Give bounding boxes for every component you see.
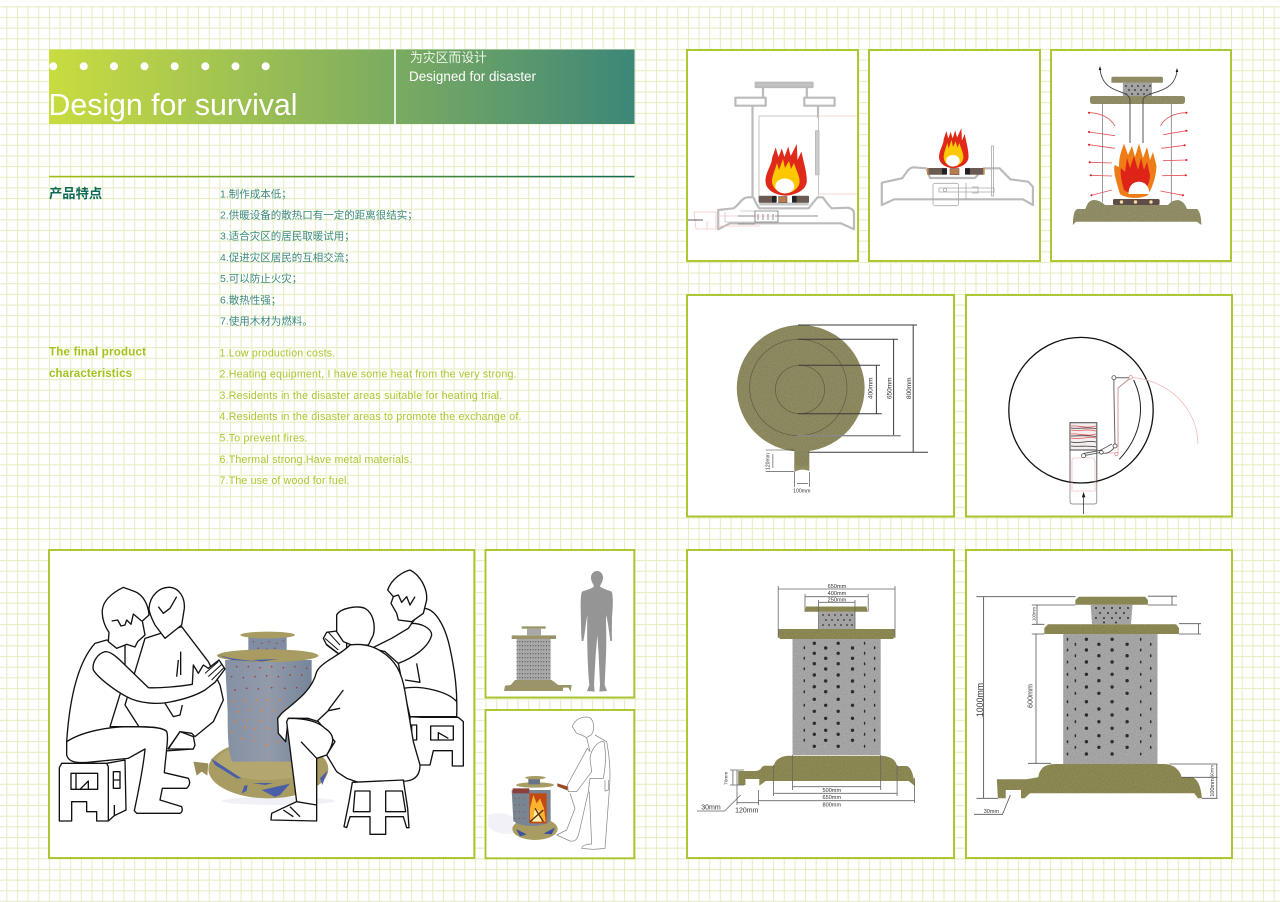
dimension lines xyxy=(974,596,1218,814)
header banner xyxy=(48,50,634,124)
shadow xyxy=(488,813,513,834)
red heat arrows xyxy=(1089,113,1186,195)
logs xyxy=(927,168,985,175)
panel: section view with fire xyxy=(687,50,858,261)
list: chinese features: 5.可以防止火灾； xyxy=(220,272,302,285)
dimension: 800mm bottom: 800mm xyxy=(822,802,841,808)
linkage xyxy=(1084,378,1141,459)
list: chinese features: 4.促进灾区居民的互相交流； xyxy=(220,251,355,264)
dimension: 100mm: 100mm xyxy=(793,488,810,494)
hatched tab xyxy=(1070,423,1097,504)
body xyxy=(1063,634,1158,764)
stove section outline xyxy=(718,83,854,229)
dimension: 250mm top: 250mm xyxy=(828,598,847,604)
panel: heat flow diagram xyxy=(1051,50,1231,261)
list: chinese features: 3.适合灾区的居民取暖试用； xyxy=(220,230,355,243)
edge holes xyxy=(804,642,875,747)
top cap xyxy=(1075,597,1148,605)
title: Design for survival xyxy=(48,88,298,122)
dimension: 120mm: 120mm xyxy=(766,453,772,470)
rising smoke arrows xyxy=(1100,69,1177,143)
dimension: 70mm: 70mm xyxy=(724,772,730,785)
base xyxy=(1073,200,1201,225)
base xyxy=(738,756,915,786)
dimension: 400mm top: 400mm xyxy=(828,591,847,597)
input arrow xyxy=(688,219,703,221)
dimension: 650mm bottom: 650mm xyxy=(822,795,841,801)
panel: scale comparison with human xyxy=(486,550,634,698)
panel: door mechanism top view xyxy=(966,295,1232,516)
list: chinese features: 1.制作成本低； xyxy=(220,187,292,200)
human silhouette xyxy=(581,571,613,692)
stool: left xyxy=(59,760,126,821)
top cap xyxy=(805,606,868,612)
perforated neck xyxy=(1123,83,1152,96)
neck holes xyxy=(823,615,852,625)
walls xyxy=(1102,104,1171,202)
list: english features: 3.Residents in the disaster areas suitable for heating trial. xyxy=(220,390,502,402)
panel: side elevation with dimensions xyxy=(966,550,1232,858)
person outline xyxy=(557,717,610,849)
dimension: 120mm: 120mm xyxy=(735,808,759,814)
lid xyxy=(778,629,895,639)
lid xyxy=(1044,624,1179,634)
list: english features: 1.Low production costs. xyxy=(220,347,335,359)
neck holes xyxy=(1096,608,1128,622)
body holes xyxy=(1086,639,1127,754)
stove render xyxy=(193,632,335,805)
dimension: 90mm: 90mm xyxy=(1210,765,1214,777)
dimension: 650mm top: 650mm xyxy=(828,584,847,590)
housing circle xyxy=(1009,337,1153,483)
push arrow xyxy=(1082,493,1085,514)
stool: right xyxy=(410,717,463,766)
body holes xyxy=(814,643,852,746)
person: front left xyxy=(67,587,225,813)
flame xyxy=(939,128,969,168)
dimension: 500mm: 500mm xyxy=(822,788,841,794)
panel: people gathered around stove xyxy=(49,550,474,858)
subtitle english: Designed for disaster xyxy=(409,69,537,84)
dimension: 30mm: 30mm xyxy=(701,804,721,812)
edge holes xyxy=(1068,638,1151,755)
panel: front elevation with dimensions xyxy=(687,550,954,858)
person: back left xyxy=(125,587,223,752)
mechanism xyxy=(933,146,994,206)
list: english features: 5.To prevent fires. xyxy=(220,432,308,444)
list: english features: 4.Residents in the disaster areas to promote the exchange of. xyxy=(220,411,522,423)
person: back right xyxy=(372,570,457,717)
panel: person feeding the stove xyxy=(486,710,634,858)
list: english features xyxy=(220,347,522,487)
heading: final product characteristics: The final product xyxy=(49,347,146,359)
panel: top view with dimensions xyxy=(687,295,954,516)
stove with fire xyxy=(512,776,558,840)
perforated neck xyxy=(1091,605,1132,624)
pink mechanism lines xyxy=(694,116,857,229)
list: chinese features: 2.供暖设备的散热口有一定的距离很结实； xyxy=(220,208,418,222)
mechanism xyxy=(738,211,818,224)
list: english features: 6.Thermal strong.Have metal materials. xyxy=(220,454,412,466)
pink swing arc xyxy=(1131,377,1198,444)
subtitle chinese: 为灾区而设计 xyxy=(410,50,487,65)
flame xyxy=(766,144,807,196)
dimension lines xyxy=(697,586,915,811)
top view circles xyxy=(737,325,865,472)
list: chinese features xyxy=(220,187,418,328)
person: front right xyxy=(271,607,420,821)
flame xyxy=(1114,144,1156,198)
base xyxy=(997,764,1202,798)
dimension: 100mm base: 100mm xyxy=(1210,778,1216,797)
perforated neck xyxy=(819,612,855,629)
stool: front right xyxy=(344,780,409,834)
header dots xyxy=(53,62,266,70)
neck holes xyxy=(1126,86,1150,94)
dimension: 100mm neck: 100mm xyxy=(1032,607,1036,621)
lid xyxy=(1090,96,1185,104)
body xyxy=(792,639,881,755)
logs xyxy=(759,196,809,203)
log in hand xyxy=(557,783,568,790)
dimension: 650mm: 650mm xyxy=(886,377,894,399)
pivots xyxy=(1082,376,1132,458)
dimension: 1000mm: 1000mm xyxy=(975,683,985,717)
dimension lines xyxy=(766,325,928,487)
dimension: 600mm: 600mm xyxy=(1026,684,1034,708)
dimension: 800mm: 800mm xyxy=(906,377,913,399)
heading: final product characteristics: characteristics xyxy=(49,368,132,380)
mini stove xyxy=(504,626,572,692)
list: english features: 2.Heating equipment, I have some heat from the very strong. xyxy=(220,369,516,381)
list: chinese features: 7.使用木材为燃料。 xyxy=(220,314,313,328)
logs xyxy=(1113,199,1160,205)
panel: section view of base xyxy=(869,50,1040,261)
dimension: 400mm: 400mm xyxy=(868,377,874,399)
top cap xyxy=(1111,77,1163,83)
heading: final product characteristics xyxy=(49,347,146,380)
dimension: 30mm: 30mm xyxy=(984,809,999,815)
base outline xyxy=(882,167,1033,205)
heading: product features chinese: 产品特点 xyxy=(49,185,102,201)
list: chinese features: 6.散热性强； xyxy=(220,293,281,306)
list: english features: 7.The use of wood for fuel. xyxy=(220,475,350,487)
